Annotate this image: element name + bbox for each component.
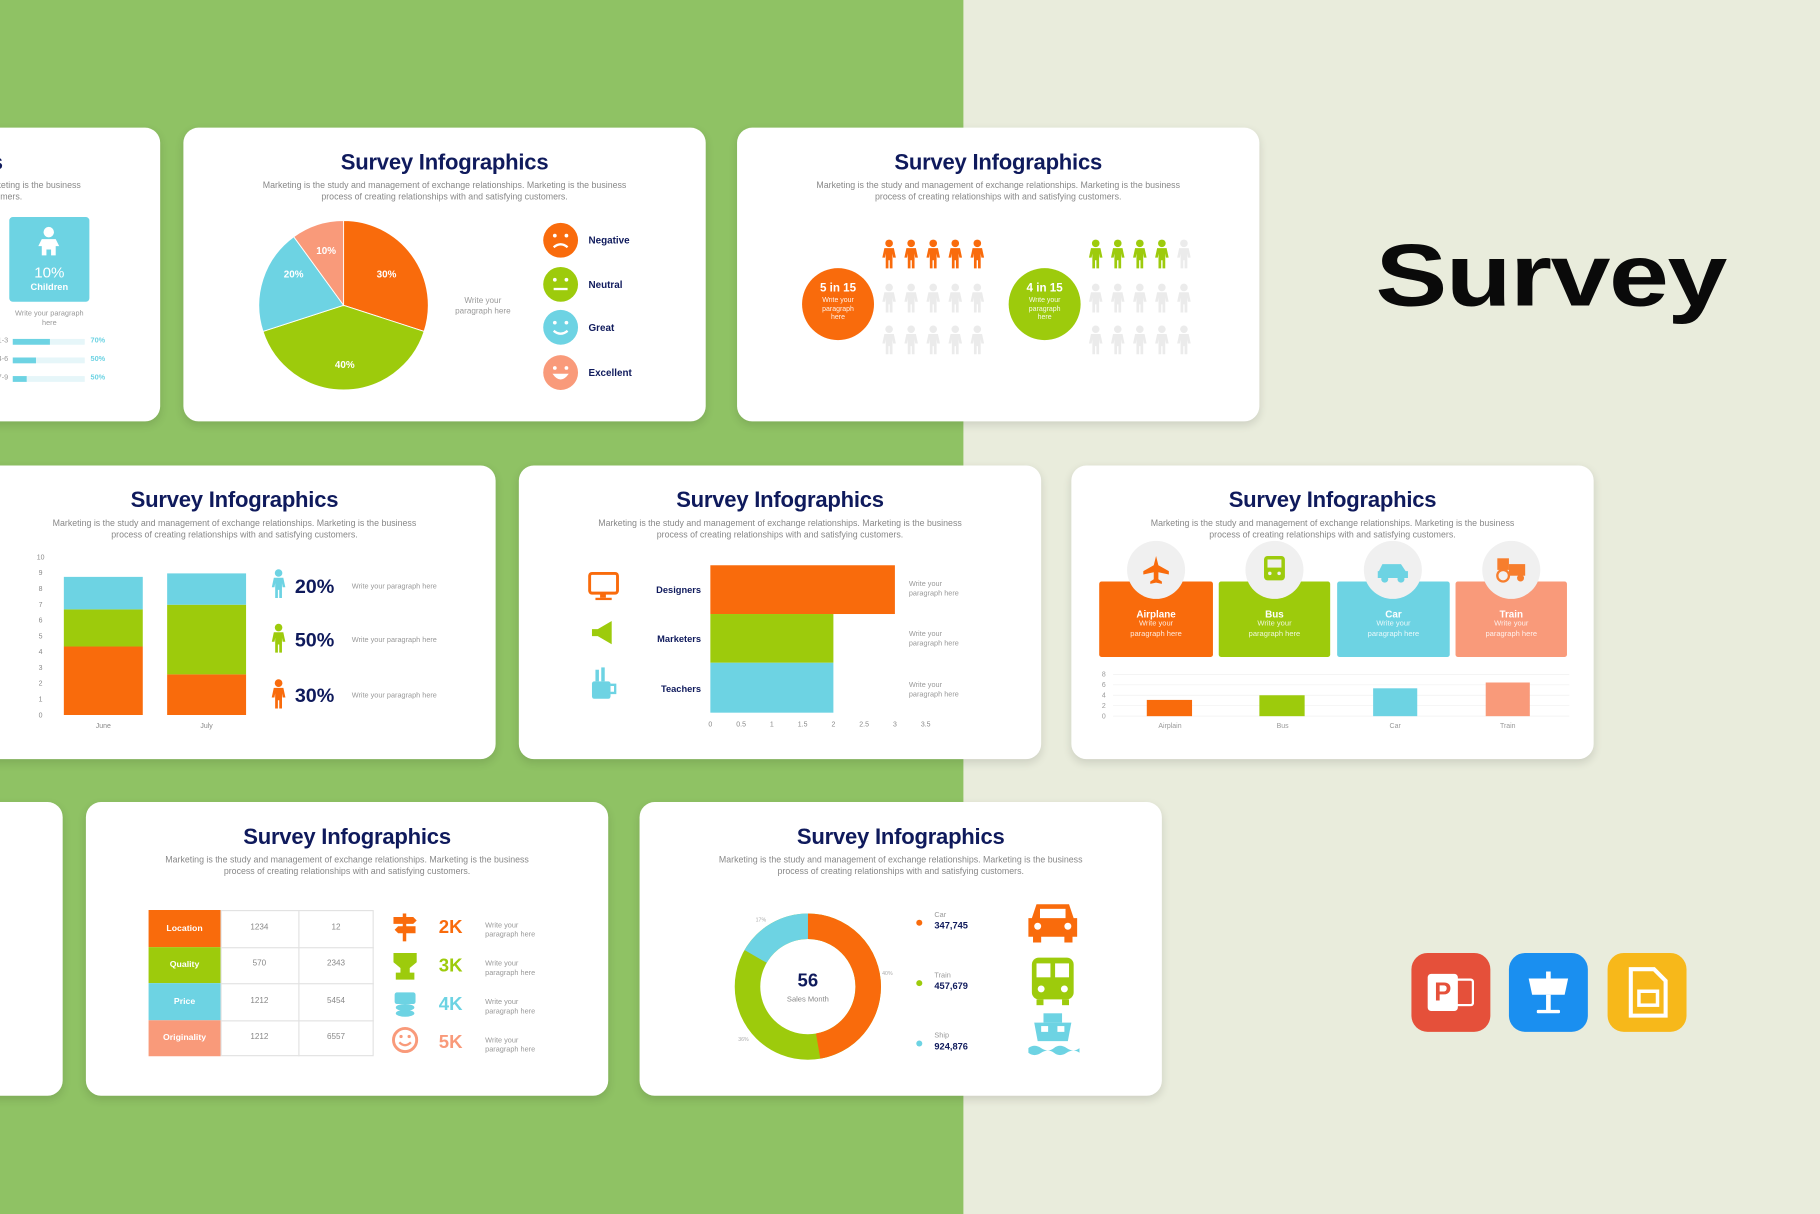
orange stat circle: paragraph [822,306,854,313]
stacked bar chart: 10 [37,554,45,561]
stacked bar chart [37,554,246,730]
bar chart: 2.5 [859,722,869,729]
stats notes [485,922,535,939]
icon: google slides [1608,953,1687,1032]
stacked bar chart: 9 [39,570,43,577]
title: Survey Infographics [894,151,1102,175]
donut legend [916,911,968,1052]
donut legend: Train [934,972,951,980]
card: transport: Write your [1494,620,1528,628]
pie chart: 40% [335,360,355,371]
stacked bar chart: 3 [39,665,43,672]
card: transport: paragraph here [1249,630,1300,638]
icon: powerpoint [1411,953,1490,1032]
bar chart: 0.5 [736,722,746,729]
stacked bar chart: June [96,723,111,730]
card: transport: Write your [1376,620,1411,628]
donut chart: 40% [882,971,893,977]
icon: powerpoint: P [1434,977,1451,1006]
data table: 1234 [250,924,268,932]
pie chart: 30% [377,269,397,280]
legend: Great [588,322,614,333]
legend: Neutral [588,279,622,290]
stacked bar chart: 5 [39,633,43,640]
small column chart: Car [1390,723,1401,730]
green stat circle: here [1038,315,1052,322]
card: horizontal bar: Write your [909,681,942,689]
percentage legend: 50% [295,629,334,651]
bar notes: paragraph here [909,590,959,598]
card: table [86,802,608,1096]
donut legend: Car [934,911,946,919]
card: table: paragraph here [485,1046,535,1054]
bar chart: 1.5 [798,722,808,729]
card: table: 4K [439,995,462,1014]
card: transport: Write your [1257,620,1292,628]
bar chart: 1 [770,722,774,729]
card: blank partial [0,802,63,1096]
box labels [1130,608,1182,638]
data table: 12 [331,924,341,932]
bar notes [909,580,959,598]
donut chart: 17% [756,918,766,924]
legend: Negative [588,234,630,246]
card: horizontal bar [519,465,1041,759]
data table: Originality [163,1032,206,1042]
card: table: Write your [485,1037,518,1045]
card: people ratio [737,128,1259,421]
donut legend: 924,876 [934,1041,968,1052]
green stat circle: 4 in 15 [1027,282,1063,295]
orange stat circle: here [831,315,845,322]
card: table: Write your [485,998,518,1006]
stacked bar chart: 4 [39,649,43,656]
percentage legend: 20% [295,576,334,598]
stacked bar chart: 0 [39,712,43,719]
title: Survey Infographics [131,489,338,513]
small column chart: 0 [1102,713,1106,720]
subtitle: Marketing is the study and management of exchange relationships. Marketing is the business process of creating relationships with and satisfying customers. [53,518,416,540]
subtitle: Marketing is the study and management of exchange relationships. Marketing is the business process of creating relationships with and satisfying customers. [719,854,1082,876]
donut legend: Ship [934,1032,949,1040]
data table: 570 [253,960,266,968]
card: horizontal bar: paragraph here [909,640,959,648]
card: transport: paragraph here [1485,630,1537,638]
progress bars: 70% [91,337,105,345]
subtitle: Marketing is the study and management of exchange relationships. Marketing is the business process of creating relationships with and satisfying customers. [598,518,962,540]
orange stat circle: Write your [822,297,854,304]
box labels: Airplane [1136,608,1176,620]
stacked bar chart: 7 [39,602,43,609]
small column chart: Bus [1277,723,1289,730]
title: Survey Infographics [676,489,884,513]
stats notes: paragraph here [485,931,535,939]
small column chart: 4 [1102,693,1106,700]
legend [543,222,632,390]
progress bars: 50% [91,355,105,363]
stacked bar chart: 1 [39,697,43,704]
children stat box [9,217,89,302]
subtitle: Marketing is the study and management of exchange relationships. Marketing is the business process of creating relationships with and satisfying customers. [1151,518,1514,540]
data table: 2343 [327,960,345,968]
card: pie chart [183,128,706,421]
box labels: paragraph here [1130,630,1182,638]
data table [148,910,374,1056]
donut legend: 457,679 [934,981,968,991]
stacked bar chart: 8 [39,586,43,593]
title: Survey Infographics [797,825,1005,850]
children stat box: Children [30,282,68,292]
card: transport [1071,465,1594,759]
percentage legend: Write your paragraph here [352,583,437,591]
green stat circle: paragraph [1029,306,1061,313]
transport boxes [1099,582,1213,657]
data table: Location [166,923,203,933]
card: horizontal bar: Teachers [661,684,701,694]
percentage legend: Write your paragraph here [352,636,437,644]
card: table: 3K [439,956,462,976]
subtitle: Marketing is the study and management of exchange relationships. Marketing is the business process of creating relationships with and satisfying customers. [816,180,1180,202]
stacked bar chart: 6 [39,618,43,625]
card: transport: paragraph here [1368,630,1419,638]
subtitle: Marketing is the study and management of exchange relationships. Marketing is the business process of creating relationships with and satisfying customers. [263,180,626,202]
card: transport: Bus [1265,608,1284,620]
data table: Quality [170,959,199,969]
card: partial children [0,128,160,421]
bar chart: 3 [893,722,897,729]
small column chart: Train [1500,723,1516,730]
stacked bar chart: July [200,723,213,730]
card: table: 5K [439,1033,462,1053]
paragraph: Write your paragraph here [15,310,84,327]
percentage legend: 30% [295,685,334,707]
green people grid [1089,240,1190,354]
card: horizontal bar: 0 [708,722,712,729]
pie chart: 10% [316,246,336,257]
card: horizontal bar: paragraph here [909,691,959,699]
card: transport: Car [1385,608,1402,620]
progress bars [0,337,105,382]
icon: keynote [1509,953,1588,1032]
bar chart: 3.5 [921,722,931,729]
card: horizontal bar: Marketers [657,634,701,644]
small column chart: 2 [1102,703,1106,710]
data table: Price [174,996,195,1006]
progress bars: 50% [91,374,105,382]
small column chart: 8 [1102,672,1106,679]
heading: Survey: Survey [1375,226,1726,325]
card: transport: Train [1499,608,1523,620]
app icons [1411,953,1686,1032]
green stat circle: Write your [1029,297,1060,304]
pie chart: 20% [284,269,304,280]
card: table: paragraph here [485,1007,535,1016]
pie chart [259,221,428,390]
donut chart: Sales Month [787,995,829,1004]
small column chart: 6 [1102,682,1106,689]
orange stat circle [802,268,874,340]
card: donut [640,802,1162,1096]
bar notes: Write your [909,580,942,588]
legend: Excellent [588,367,632,378]
title: Survey Infographics [341,151,548,175]
children stat box: 10% [34,263,64,281]
orange people grid [882,240,984,354]
small column chart: Airplain [1158,723,1182,730]
small column chart [1102,672,1570,730]
card: horizontal bar: Write your [909,630,942,638]
donut legend: 347,745 [934,920,968,931]
card: table: paragraph here [485,969,535,977]
title: Survey Infographics [243,825,451,850]
bar chart [708,565,931,729]
card: stacked bar [0,465,496,759]
paragraph: Write your paragraph here [455,297,511,316]
bar chart: 2 [831,722,835,729]
donut chart [734,914,893,1060]
stats notes: Write your [485,922,518,930]
orange stat circle: 5 in 15 [820,282,856,295]
box labels: Write your [1139,620,1173,628]
green stat circle [1009,268,1081,340]
card: table: Write your [485,960,518,968]
percentage legend [272,569,437,708]
transport icons [1028,904,1080,1056]
data table: 5454 [327,997,345,1005]
icon circles [1127,541,1540,599]
subtitle: Marketing is the study and management of exchange relationships. Marketing is the business process of creating relationships with and satisfying customers. [165,854,529,876]
stacked bar chart: 2 [39,681,43,688]
title: Survey Infographics [1229,489,1436,513]
stats values: 2K [439,918,462,938]
category icons [588,572,619,699]
category labels: Designers [656,585,701,595]
data table: 1212 [250,1033,268,1041]
stats icons [392,913,418,1053]
donut chart: 36% [738,1037,749,1043]
donut chart: 56 [798,970,818,991]
data table: 1212 [250,997,268,1005]
percentage legend: Write your paragraph here [352,692,437,700]
data table: 6557 [327,1033,345,1041]
